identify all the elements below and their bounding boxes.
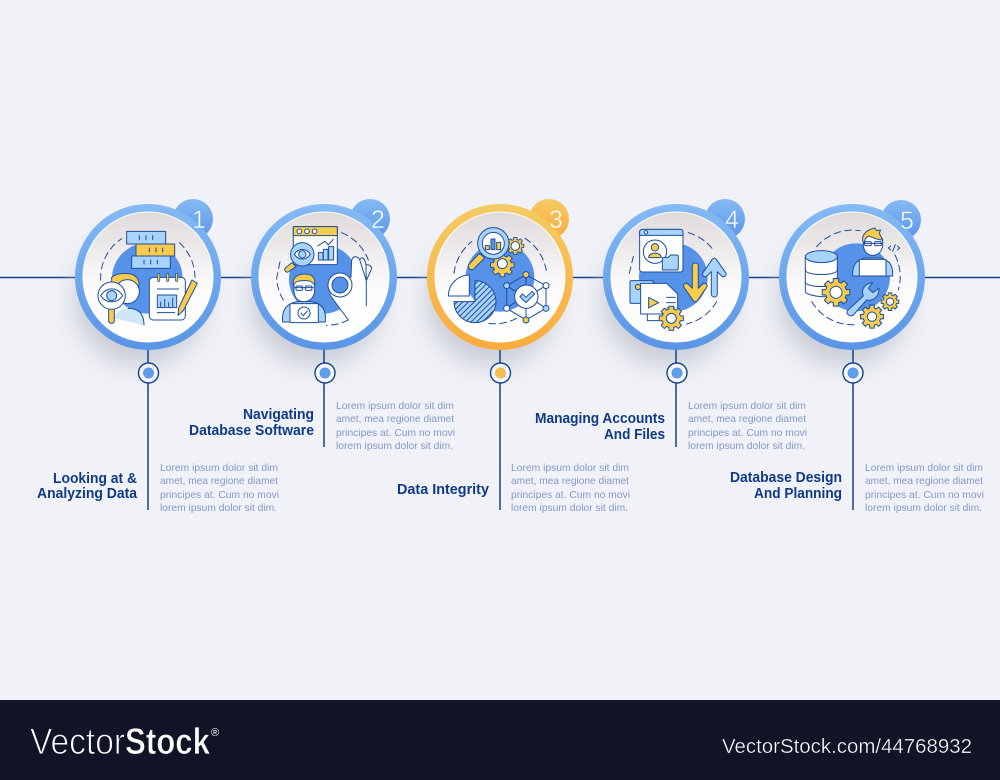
- text block: step 2 description: Lorem ipsum dolor sit dim: [336, 400, 454, 412]
- label: step 5 title: Database Design: [730, 470, 842, 486]
- label: step 4 title: Managing Accounts: [535, 411, 665, 427]
- step 3 badge and ring: [426, 199, 573, 510]
- text block: step 2 description: lorem ipsum dolor sit dim.: [336, 440, 453, 452]
- icon: database design: [805, 228, 900, 328]
- icon: navigating software: [277, 227, 372, 325]
- label: step 2 title: Database Software: [189, 423, 314, 439]
- timeline horizontal line: [0, 276, 1000, 278]
- step 2: [250, 199, 397, 447]
- text block: step 1 description: amet, mea regione diamet: [160, 475, 278, 487]
- step 2 badge and ring: 2: [371, 206, 385, 234]
- text block: step 3 description: amet, mea regione diamet: [511, 475, 629, 487]
- step 4 badge and ring: 4: [725, 206, 739, 234]
- text block: step 5 description: Lorem ipsum dolor sit dim: [865, 462, 983, 474]
- text block: step 4 description: lorem ipsum dolor sit dim.: [688, 440, 805, 452]
- step 4 badge and ring: [602, 199, 749, 447]
- text block: step 4 description: principes at. Cum no movi: [688, 427, 807, 439]
- footer bar: [0, 700, 1000, 780]
- text block: step 3 description: principes at. Cum no movi: [511, 489, 630, 501]
- text block: step 4 description: amet, mea regione diamet: [688, 413, 806, 425]
- text block: step 2 description: principes at. Cum no movi: [336, 427, 455, 439]
- step 3 badge and ring: 3: [549, 206, 563, 234]
- icon: data stack and analysis: [98, 231, 197, 325]
- text block: step 1 description: lorem ipsum dolor sit dim.: [160, 502, 277, 514]
- text block: step 3 description: Lorem ipsum dolor sit dim: [511, 462, 629, 474]
- footer logo: ®: [211, 727, 219, 739]
- text block: step 2 description: amet, mea regione diamet: [336, 413, 454, 425]
- text block: step 5 description: principes at. Cum no movi: [865, 489, 984, 501]
- icon: accounts and files: [629, 229, 726, 330]
- text block: step 3 description: lorem ipsum dolor sit dim.: [511, 502, 628, 514]
- label: step 1 title: Looking at &: [53, 471, 137, 487]
- step 1 badge and ring: 1: [192, 206, 206, 234]
- step 1 badge and ring: [74, 199, 221, 510]
- step 5 badge and ring: [778, 200, 925, 510]
- text block: step 1 description: Lorem ipsum dolor sit dim: [160, 462, 278, 474]
- text block: step 4 description: Lorem ipsum dolor sit dim: [688, 400, 806, 412]
- text block: step 5 description: amet, mea regione diamet: [865, 475, 983, 487]
- step 1: [74, 199, 221, 510]
- footer logo: Vector: [30, 721, 125, 762]
- step 5 badge and ring: 5: [900, 207, 914, 235]
- text block: step 5 description: lorem ipsum dolor sit dim.: [865, 502, 982, 514]
- label: step 2 title: Navigating: [243, 407, 314, 423]
- text block: step 1 description: principes at. Cum no movi: [160, 489, 279, 501]
- label: step 5 title: And Planning: [754, 486, 842, 502]
- step 4: [602, 199, 749, 447]
- footer image id: VectorStock.com/44768932: [722, 736, 972, 758]
- label: step 4 title: And Files: [604, 427, 665, 443]
- icon: data integrity: [448, 228, 549, 324]
- footer logo: [30, 721, 219, 762]
- step 5: [778, 200, 925, 510]
- step 3: [426, 199, 573, 510]
- step 2 badge and ring: [250, 199, 397, 447]
- label: step 1 title: Analyzing Data: [37, 486, 138, 502]
- footer logo: Stock: [125, 721, 210, 762]
- label: step 3 title: Data Integrity: [397, 482, 489, 498]
